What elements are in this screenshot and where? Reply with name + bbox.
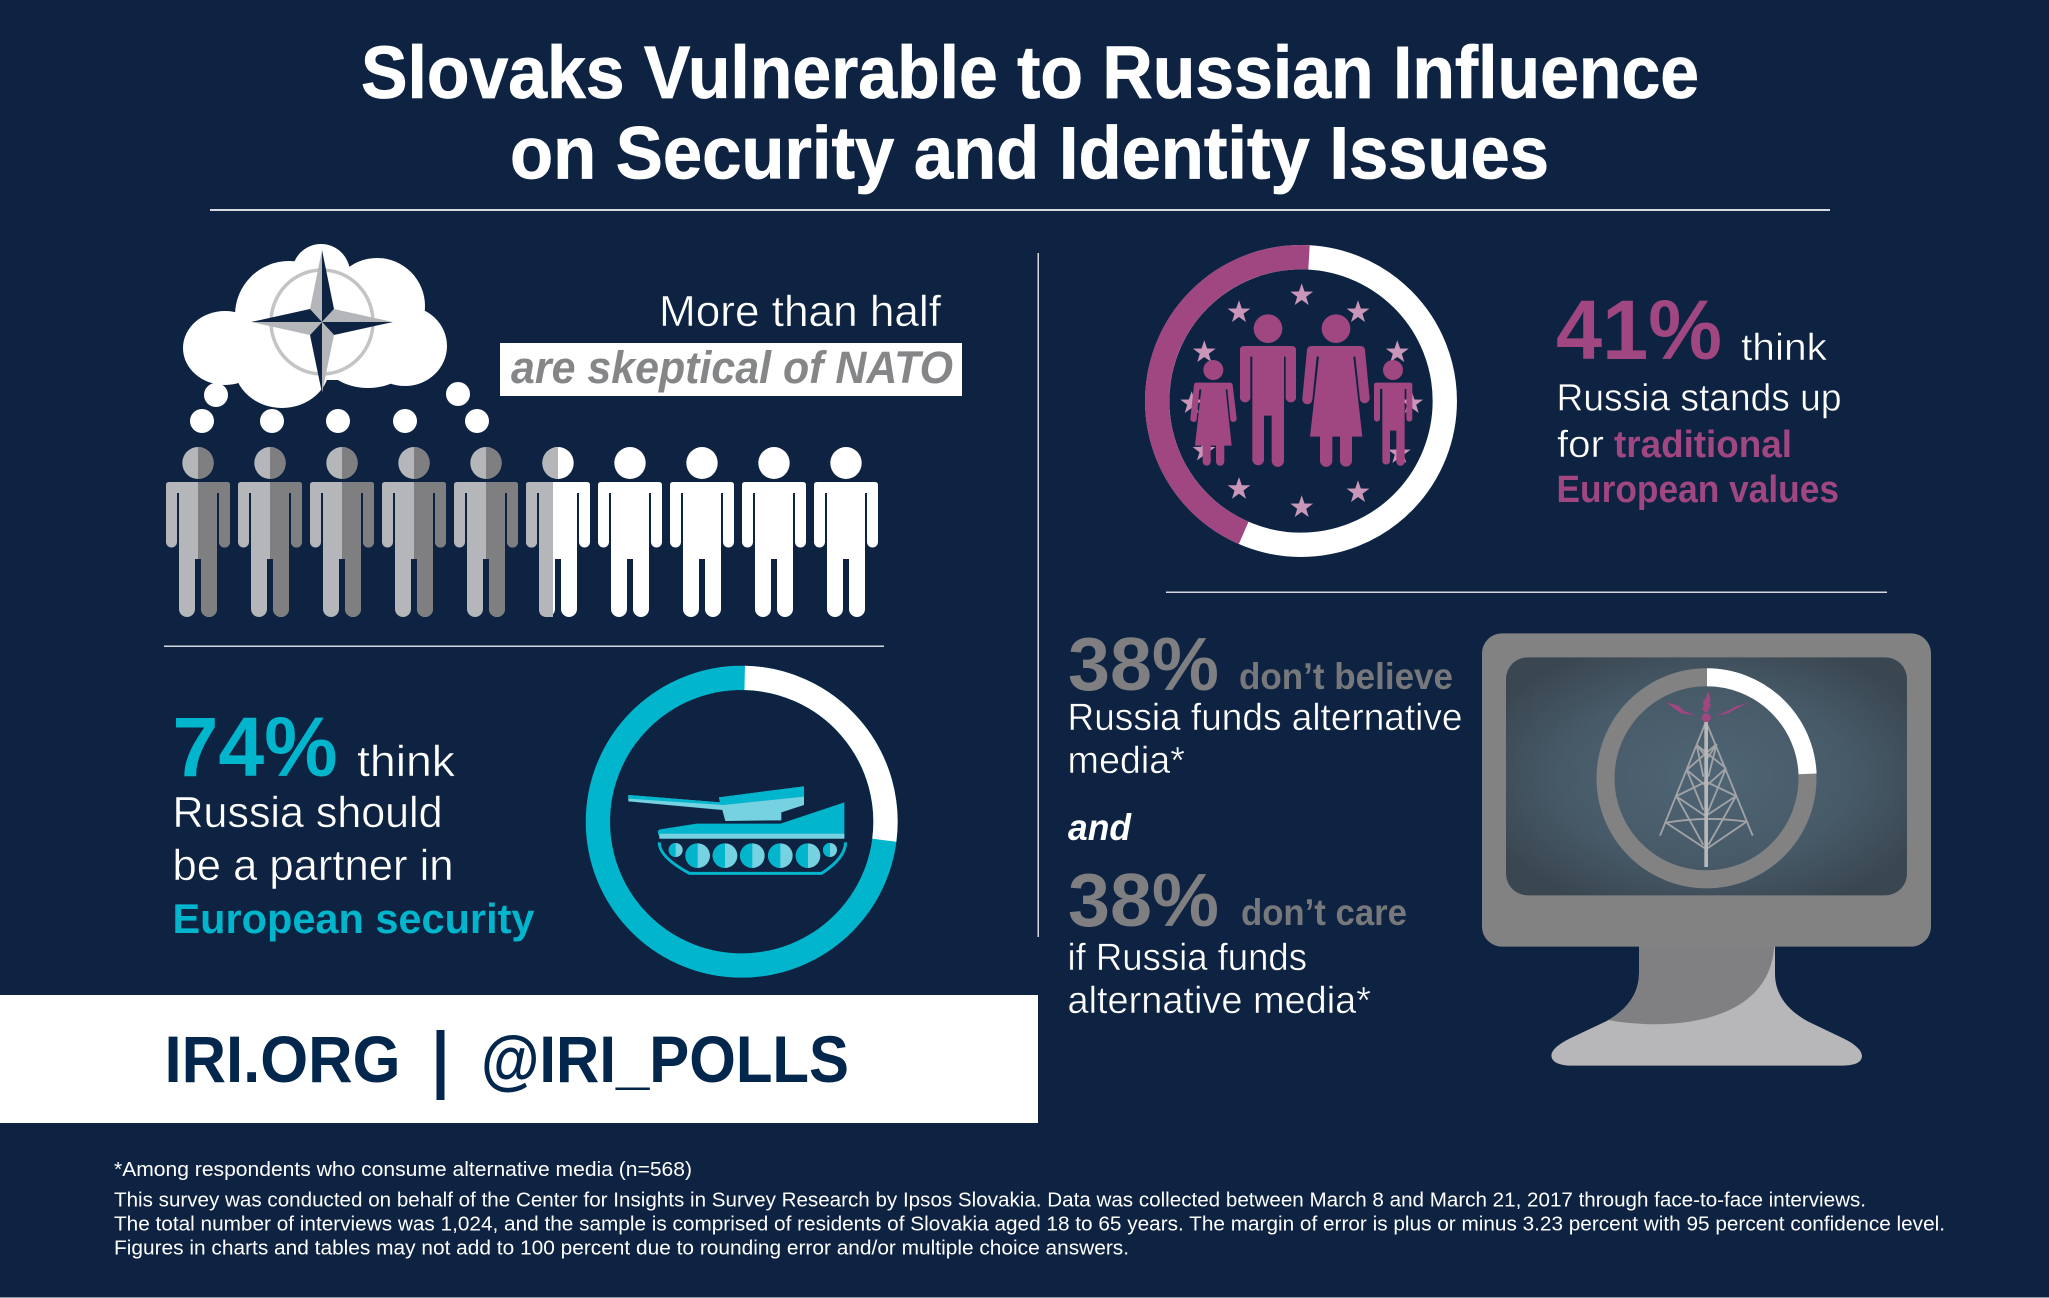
stat: 38% don't believe [1068, 622, 1453, 706]
stat: 74% think [172, 700, 456, 794]
text: Russia should be a partner in European security [172, 788, 535, 942]
title: Slovaks Vulnerable to Russian Influence [361, 31, 1699, 114]
title: on Security and Identity Issues [510, 112, 1549, 194]
icon: ring of stars [1180, 283, 1423, 517]
panel: alternative media [1068, 622, 1931, 1066]
footnotes [114, 1158, 1945, 1260]
callout: are skeptical of NATO: are skeptical of NATO [511, 342, 953, 393]
icon: tank [628, 786, 846, 873]
panel: NATO skepticism [166, 244, 962, 617]
text: if Russia funds alternative media [1068, 937, 1371, 1022]
footnotes: The total number of interviews was 1,024, and the sample is comprised of residents of Slovakia aged 18 to 65 years. The margin of error is plus or minus 3.23 percent with 95 percent confidence level. [114, 1212, 1945, 1236]
panel: European security [172, 678, 886, 966]
footnotes: This survey was conducted on behalf of the Center for Insights in Survey Research by Ipsos Slovakia. Data was collected between March 8 and March 21, 2017 through face-to-face interviews. [114, 1188, 1866, 1212]
text: more than half: More than half [659, 287, 942, 336]
text: Russia stands up for traditional European values [1556, 378, 1842, 511]
text: Russia should be a partner in European security: Russia should [172, 788, 442, 837]
text: and: and [1068, 807, 1132, 848]
text: Russia funds alternative media [1068, 697, 1462, 782]
stat: 41% think: think [1741, 327, 1828, 369]
footnotes: *Among respondents who consume alternative media (n=568) [114, 1158, 692, 1181]
banner: IRI.ORG and @IRI_POLLS: @IRI_POLLS [481, 1022, 849, 1096]
pictogram: ten people, 5.5 skeptical [166, 447, 878, 617]
banner: IRI.ORG and @IRI_POLLS: IRI.ORG [164, 1022, 400, 1096]
stat: 74% think: 74% [172, 700, 338, 794]
stat: 38% don't care [1068, 858, 1407, 942]
donut chart: 41 percent with EU stars [1157, 257, 1445, 545]
stat: 38% don't believe: don’t believe [1239, 656, 1453, 697]
stat: 38% don't believe: 38% [1068, 622, 1219, 706]
text: Russia funds alternative media: Russia funds alternative [1068, 697, 1462, 739]
icon: family [1190, 314, 1412, 467]
stat: 74% think: think [357, 737, 456, 786]
text: Russia should be a partner in European security: European security [172, 895, 535, 942]
text: Russia stands up for traditional European values: for [1557, 424, 1604, 466]
icon: computer monitor [1482, 633, 1931, 1066]
text: Russia stands up for traditional European values: traditional [1614, 424, 1792, 466]
footnotes: Figures in charts and tables may not add to 100 percent due to rounding error and/or multiple choice answers. [114, 1236, 1129, 1260]
stat: 41% think: 41% [1556, 283, 1722, 377]
banner: IRI.ORG and @IRI_POLLS [0, 995, 1038, 1123]
stat: 38% don't care: 38% [1068, 858, 1219, 942]
text: Russia stands up for traditional European values: European values [1556, 469, 1839, 511]
panel: traditional European values [1157, 257, 1842, 545]
donut chart: 74 percent [598, 678, 886, 966]
text: if Russia funds alternative media: if Russia funds [1068, 937, 1307, 979]
stat: 38% don't care: don’t care [1241, 892, 1407, 933]
stat: 41% think [1556, 283, 1828, 377]
text: Russia stands up for traditional European values: Russia stands up [1556, 378, 1842, 420]
icon: thought cloud with NATO star [183, 244, 489, 433]
text: if Russia funds alternative media: alternative media* [1068, 980, 1371, 1022]
text: Russia should be a partner in European security: be a partner in [172, 841, 454, 890]
text: Russia funds alternative media: media* [1068, 740, 1185, 782]
donut chart: 24 percent on screen [1606, 677, 1808, 879]
title [361, 31, 1699, 194]
icon: broadcast tower [1660, 691, 1753, 867]
